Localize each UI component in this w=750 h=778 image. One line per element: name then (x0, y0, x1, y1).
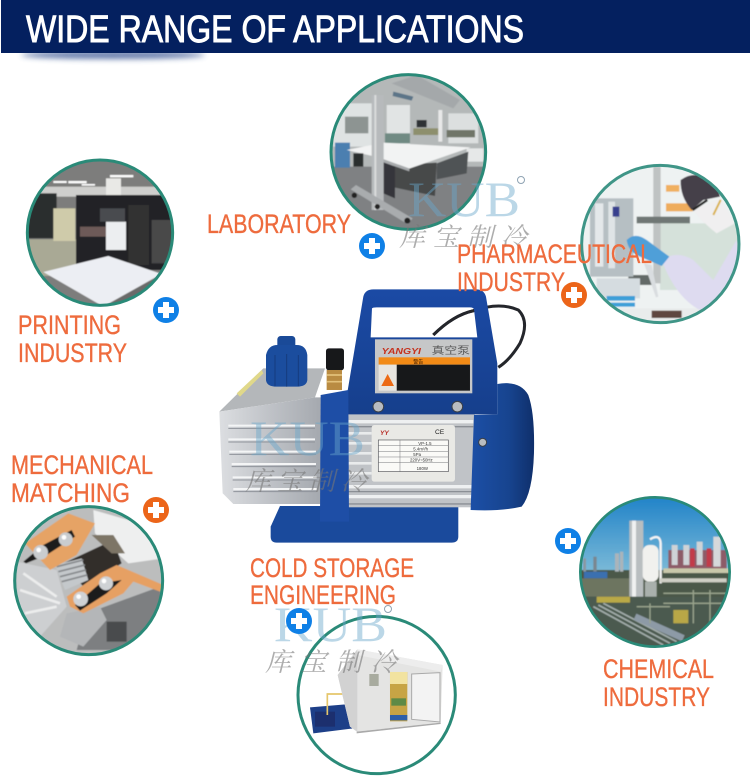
pump spec plate: YY (380, 430, 389, 437)
label: mechanical matching (11, 450, 153, 508)
title: WIDE RANGE OF APPLICATIONS (26, 9, 524, 51)
pump blue centre plate (320, 390, 349, 522)
icon: plus laboratory (359, 233, 385, 259)
header banner (1, 0, 750, 53)
label: cold storage engineering: ENGINEERING (250, 580, 396, 610)
pump spec plate: 180W (417, 466, 429, 471)
panel: chemical photo (578, 495, 732, 650)
icon: plus chemical (555, 528, 581, 554)
pump spec plate: VP-1.5 (418, 441, 432, 446)
watermark: top (399, 171, 530, 254)
label: chemical industry (603, 654, 714, 712)
watermark: bottom (265, 596, 400, 679)
label: printing industry: PRINTING (18, 310, 121, 340)
ring: pharmaceutical (582, 165, 739, 323)
watermark: centre: KUB (250, 410, 365, 466)
pump screws (373, 401, 487, 446)
ring: laboratory (331, 75, 486, 229)
pump silver body (219, 368, 325, 504)
pump handle and bracket (347, 289, 497, 414)
icon: plus cold storage (286, 608, 312, 634)
ring: printing (27, 160, 173, 305)
icon: plus printing (153, 297, 179, 323)
pump warning plate: 警告 (413, 358, 423, 365)
banner shadow (21, 51, 205, 59)
pump spec plate: CE (435, 429, 445, 436)
pump blue intake cap (266, 336, 307, 387)
label: pharmaceutical industry: INDUSTRY (457, 267, 565, 297)
pump warning plate: 真空泵 (432, 342, 470, 357)
panel: printing photo (23, 157, 180, 310)
watermark: centre: 库宝制冷 (245, 461, 370, 498)
pump warning plate (375, 339, 472, 393)
cold room illustration (310, 649, 443, 733)
vacuum pump product photo (219, 289, 534, 543)
panel: cold storage photo (298, 616, 455, 774)
pump finned motor housing (347, 413, 475, 507)
watermark: bottom: KUB (274, 596, 387, 652)
watermark: centre (245, 410, 370, 498)
watermark: bottom: 库宝制冷 (265, 642, 400, 679)
ring: cold storage (298, 616, 455, 774)
ring: chemical (580, 497, 730, 647)
label: laboratory: LABORATORY (207, 209, 351, 239)
label: mechanical matching: MATCHING (11, 478, 130, 508)
label: pharmaceutical industry (457, 239, 652, 297)
pump power cable (433, 306, 525, 367)
pump spec plate: 5.4m³/h (413, 446, 429, 451)
pump spec plate (372, 425, 455, 482)
ring: mechanical (15, 507, 163, 655)
panel: laboratory photo (330, 73, 488, 231)
label: printing industry (18, 310, 127, 368)
pump spec plate: 5Pa (413, 452, 422, 457)
pump spec plate: 220V~50Hz (410, 458, 433, 463)
pump black valve (326, 348, 344, 390)
icon: plus mechanical (143, 497, 169, 523)
watermark: top: KUB (408, 171, 520, 227)
label: chemical industry: CHEMICAL (603, 654, 714, 684)
pump motor end cap (471, 383, 534, 510)
pump warning plate: YANGYI (382, 346, 422, 356)
panel: pharmaceutical photo (580, 163, 743, 328)
label: pharmaceutical industry: PHARMACEUTICAL (457, 239, 652, 269)
label: mechanical matching: MECHANICAL (11, 450, 153, 480)
label: chemical industry: INDUSTRY (603, 682, 710, 712)
label: cold storage engineering (250, 553, 414, 610)
panel: mechanical photo (13, 507, 167, 657)
pump base (271, 506, 458, 543)
label: cold storage engineering: COLD STORAGE (250, 553, 414, 583)
cable in window (433, 311, 474, 335)
watermark: top: 库宝制冷 (399, 217, 530, 254)
label: printing industry: INDUSTRY (18, 338, 127, 368)
icon: plus pharmaceutical (561, 282, 587, 308)
